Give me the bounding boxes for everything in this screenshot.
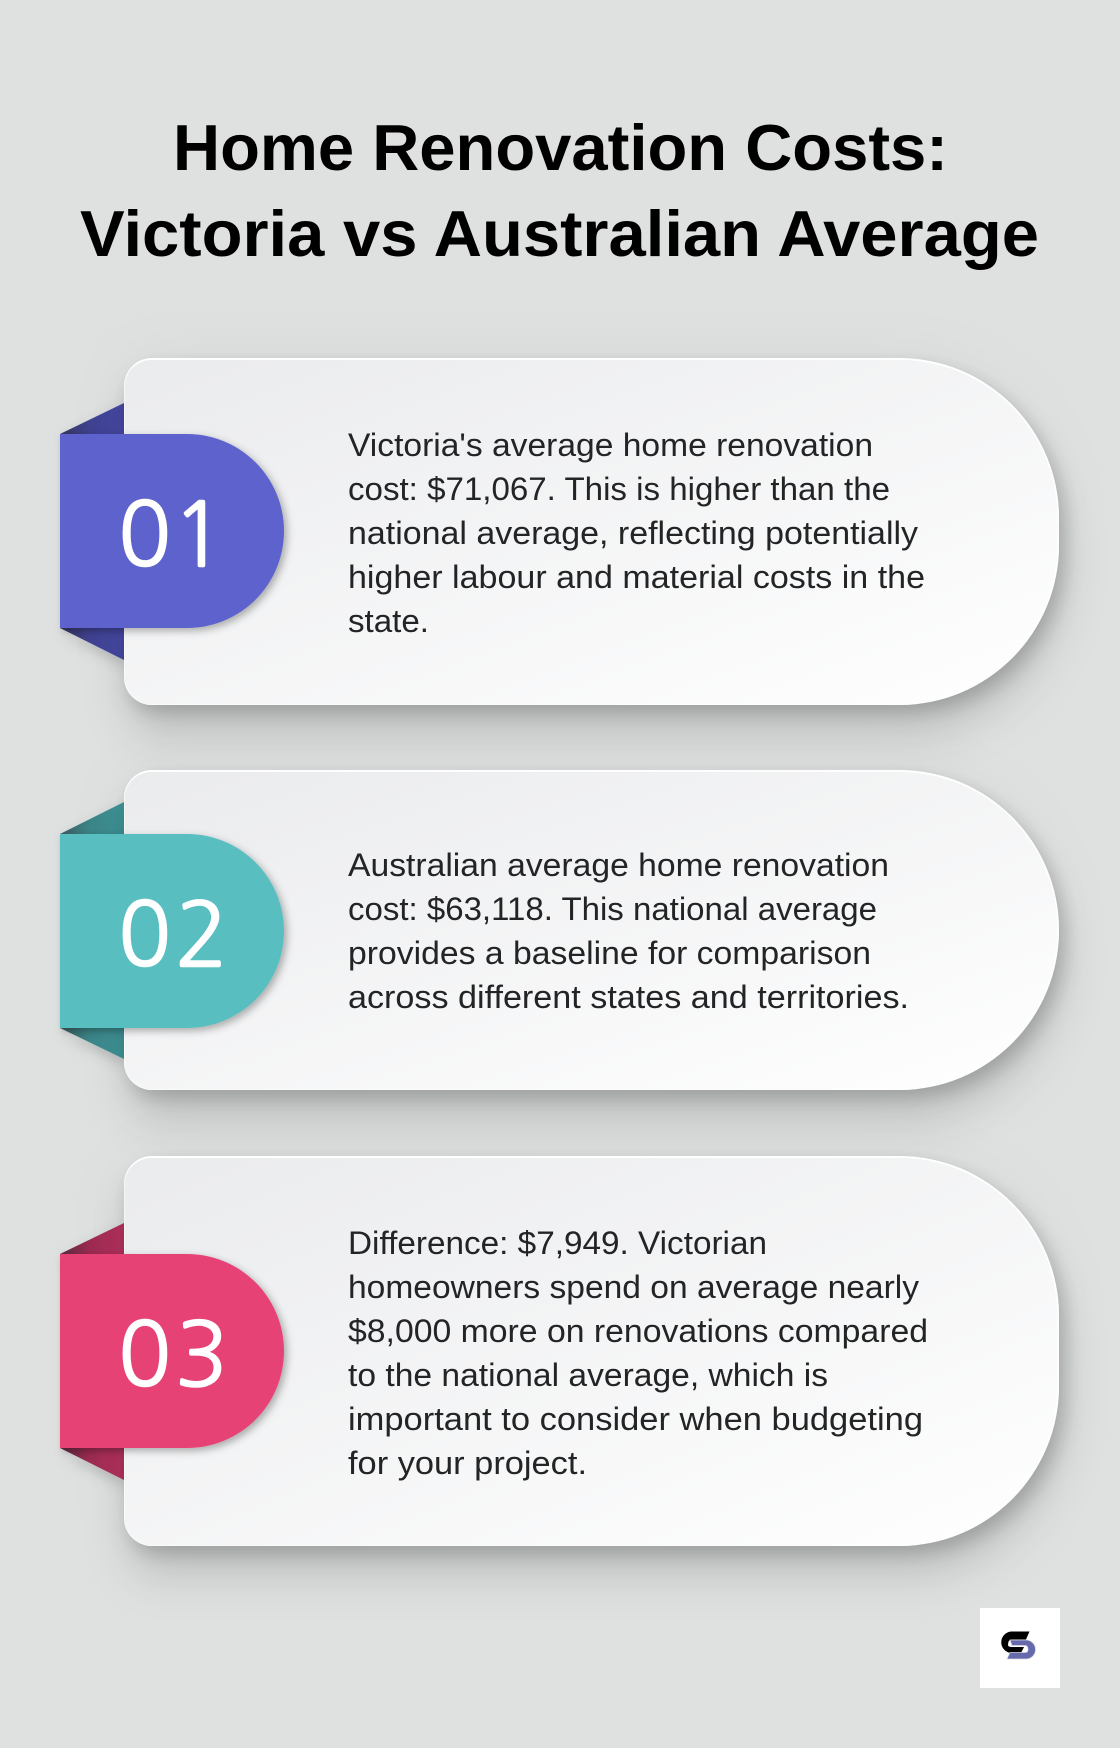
ribbon fold 3 xyxy=(60,1223,124,1480)
text: card 3: to the national average, which is xyxy=(348,1357,828,1393)
text: card 3: important to consider when budgeting xyxy=(348,1401,923,1437)
ribbon fold 2 xyxy=(60,802,124,1059)
text: card 3: homeowners spend on average nearly xyxy=(348,1269,919,1305)
icon: logo mark xyxy=(1001,1632,1036,1659)
text: card 3 xyxy=(348,1225,928,1481)
number tab 02: 02 xyxy=(118,891,228,979)
card 3 background xyxy=(124,1156,1059,1546)
text: card 1: national average, reflecting potentially xyxy=(348,515,918,551)
text: card 3: Difference: $7,949. Victorian xyxy=(348,1225,767,1261)
title: Victoria vs Australian Average xyxy=(80,197,1039,270)
text: card 2: cost: $63,118. This national average xyxy=(348,891,877,927)
text: card 3: for your project. xyxy=(348,1445,587,1481)
text: card 1: Victoria's average home renovation xyxy=(348,427,873,463)
number tab 03: 03 xyxy=(118,1311,228,1399)
number tab 01: 01 xyxy=(118,491,225,579)
text: card 2: provides a baseline for comparison xyxy=(348,935,871,971)
text: card 1: higher labour and material costs in the xyxy=(348,559,925,595)
number tab 03 xyxy=(60,1254,284,1448)
text: card 2 xyxy=(348,847,909,1015)
card 1 background xyxy=(124,358,1059,705)
panel: card 3 Difference xyxy=(60,1156,1059,1546)
number tab 01 xyxy=(60,434,284,628)
text: card 2: Australian average home renovation xyxy=(348,847,889,883)
text: card 2: across different states and territories. xyxy=(348,979,909,1015)
panel: card 1 Victoria xyxy=(60,358,1059,705)
card 2 background xyxy=(124,770,1059,1090)
number tab 02 xyxy=(60,834,284,1028)
text: card 3: $8,000 more on renovations compared xyxy=(348,1313,928,1349)
text: card 1: state. xyxy=(348,603,429,639)
text: card 1: cost: $71,067. This is higher than the xyxy=(348,471,890,507)
title xyxy=(80,111,1039,270)
ribbon fold 1 xyxy=(60,403,124,660)
text: card 1 xyxy=(348,427,925,639)
title: Home Renovation Costs: xyxy=(173,111,948,184)
logo badge xyxy=(980,1608,1060,1688)
panel: card 2 Australia xyxy=(60,770,1059,1090)
